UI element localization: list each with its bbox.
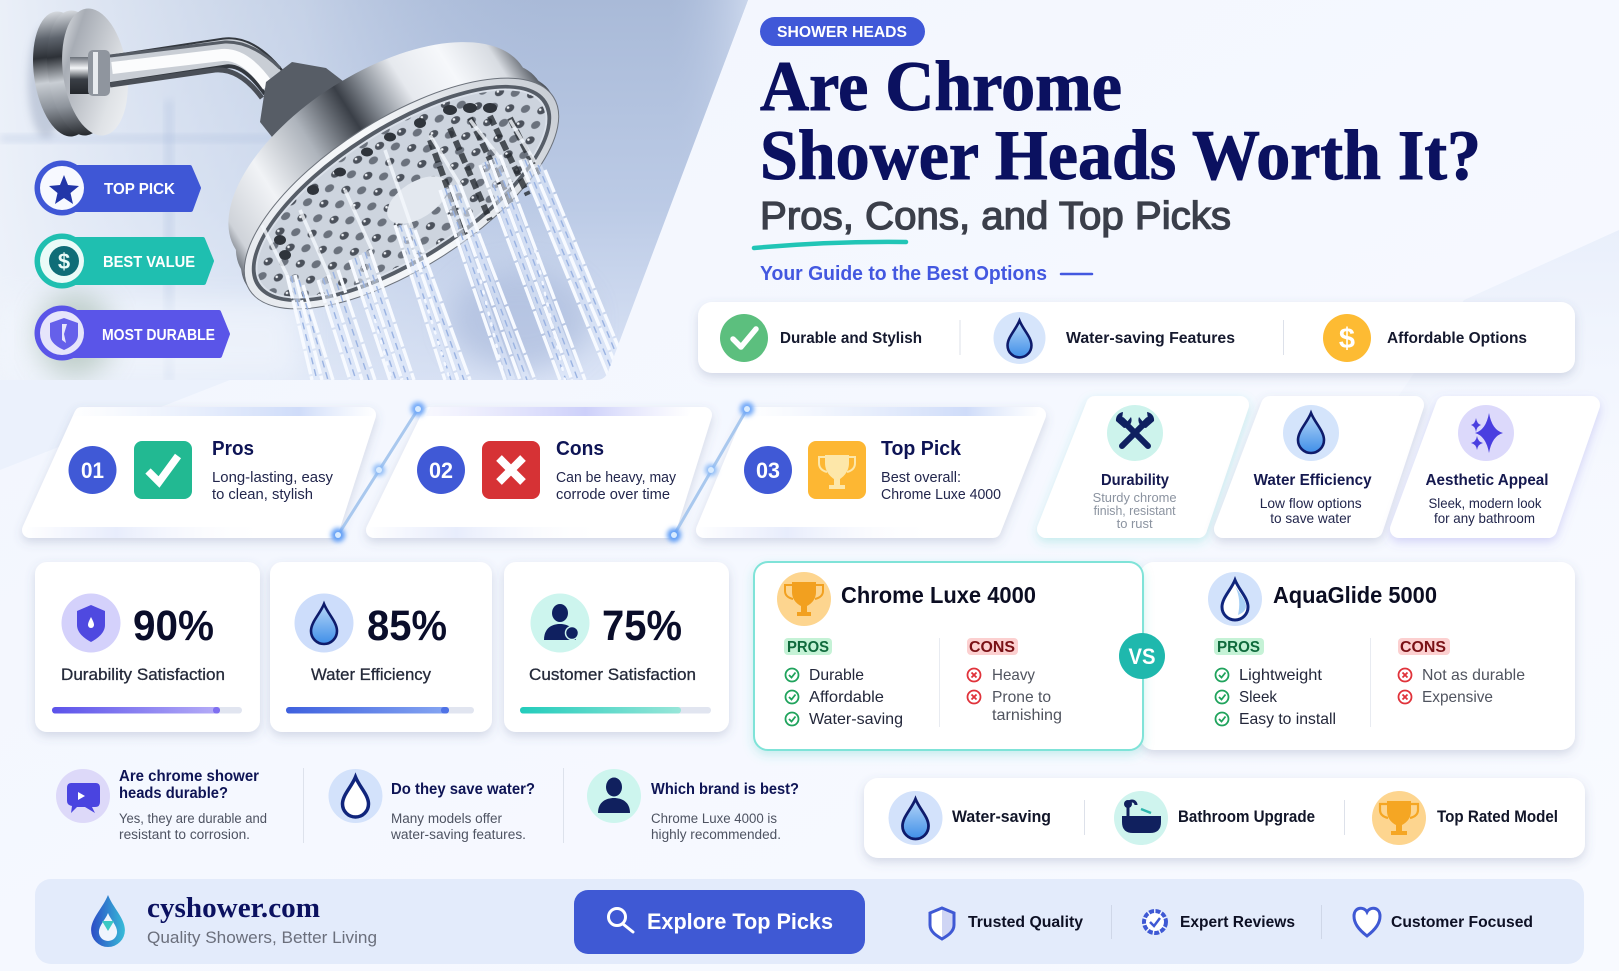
description: Best overall: xyxy=(881,470,961,486)
icon: shield xyxy=(50,318,78,350)
number 03 xyxy=(744,446,792,494)
icon: water drop xyxy=(294,594,354,652)
connector between step 1 and 2 xyxy=(331,402,425,542)
stat card: customer satisfaction xyxy=(504,562,729,732)
VS badge xyxy=(1119,633,1165,679)
icon: cross tile xyxy=(482,441,540,499)
icon: green check xyxy=(720,314,768,362)
panel: step 01 pros xyxy=(24,407,376,538)
pros list: Water-saving xyxy=(809,711,903,728)
description xyxy=(556,470,677,503)
FAQ: durability: heads durable? xyxy=(119,785,228,802)
progress bar xyxy=(286,707,474,714)
panel: water efficiency xyxy=(1223,405,1415,529)
panel: key benefits: Water-saving Features xyxy=(1066,330,1235,347)
FAQ: water saving xyxy=(328,769,535,842)
pros list: Lightweight xyxy=(1239,667,1323,684)
panel: highlights bar: Water-saving xyxy=(952,808,1051,826)
description: finish, resistant xyxy=(1094,503,1176,518)
cons list: Prone to xyxy=(992,689,1051,706)
cons list: Heavy xyxy=(992,667,1035,684)
panel: durability: Durability xyxy=(1101,472,1169,489)
trust: customer focused xyxy=(1354,908,1533,936)
pros list: Affordable xyxy=(809,689,884,706)
pros list: Durable xyxy=(809,667,864,684)
description: to clean, stylish xyxy=(212,487,313,503)
progress bar xyxy=(520,707,711,714)
FAQ: best brand: Which brand is best? xyxy=(651,781,799,798)
pros list xyxy=(784,638,903,728)
cons list: Not as durable xyxy=(1422,667,1525,684)
description: Long-lasting, easy xyxy=(212,470,334,486)
FAQ: durability: Are chrome shower xyxy=(119,768,259,785)
shower head body xyxy=(228,42,560,310)
panel: step 02 cons: Cons xyxy=(556,438,604,460)
description: Chrome Luxe 4000 xyxy=(881,487,1001,503)
panel: key benefits: Durable and Stylish xyxy=(780,330,922,347)
panel: aesthetic appeal: Aesthetic Appeal xyxy=(1426,472,1548,489)
icon: water drop xyxy=(994,312,1046,364)
description: Can be heavy, may xyxy=(556,470,677,486)
subtitle: Pros, Cons, and Top Picks xyxy=(760,195,1231,238)
description: Sleek, modern look xyxy=(1428,495,1542,511)
icon: wrench tools xyxy=(1107,405,1163,461)
icon: shield xyxy=(62,594,120,652)
FAQ: best brand: Chrome Luxe 4000 is xyxy=(651,811,777,826)
FAQ: durability: Yes, they are durable and xyxy=(119,811,267,826)
icon: sparkles xyxy=(1458,405,1514,461)
panel: step 03 top pick: Top Pick xyxy=(881,438,962,460)
panel: durability xyxy=(1046,405,1240,531)
number 01: 01 xyxy=(81,458,104,483)
icon: dollar coin xyxy=(49,246,79,276)
icon: dollar xyxy=(1323,314,1371,362)
icon: water drop xyxy=(888,791,942,845)
dark nozzles and reflections xyxy=(274,103,497,260)
neck collar xyxy=(260,62,343,137)
icon: water drop xyxy=(1208,572,1262,626)
pros list: Easy to install xyxy=(1239,711,1336,728)
badge: top pick: TOP PICK xyxy=(104,181,175,198)
wall flange xyxy=(33,8,128,136)
trust: quality xyxy=(930,908,1083,939)
button: explore top picks: Explore Top Picks xyxy=(647,909,833,934)
description xyxy=(1428,495,1542,526)
cons list xyxy=(967,638,1062,724)
comparison card: AquaGlide 5000 xyxy=(1140,562,1575,750)
badge: top pick xyxy=(34,160,199,216)
cons list: Expensive xyxy=(1422,689,1493,706)
panel: aesthetic appeal xyxy=(1399,405,1591,529)
title: Shower Heads Worth It? xyxy=(760,117,1481,195)
panel: key benefits: Affordable Options xyxy=(1387,330,1527,347)
icon: dollar: $ xyxy=(1339,323,1355,355)
number 01 xyxy=(68,446,116,494)
stat card: customer satisfaction: 75% xyxy=(602,602,682,650)
badge: most durable xyxy=(34,306,228,360)
trust: expert reviews xyxy=(1144,911,1295,933)
description: corrode over time xyxy=(556,487,670,503)
trust: customer focused: Customer Focused xyxy=(1391,914,1533,931)
pros list: PROS xyxy=(1217,639,1260,656)
footer bar: Quality Showers, Better Living xyxy=(147,928,377,947)
icon: trophy xyxy=(777,572,831,626)
badge: best value: BEST VALUE xyxy=(103,254,195,271)
logo drop xyxy=(91,895,125,947)
description xyxy=(1093,490,1177,531)
icon: person with chat xyxy=(530,594,590,652)
number 02: 02 xyxy=(429,458,453,483)
water streams xyxy=(262,120,632,380)
icon: person xyxy=(587,769,641,823)
title: Are Chrome xyxy=(760,48,1122,126)
number 03: 03 xyxy=(756,458,780,483)
wall shadow xyxy=(25,28,58,139)
FAQ: durability: resistant to corrosion. xyxy=(119,827,250,842)
cons list: tarnishing xyxy=(992,707,1062,724)
icon: dollar coin: $ xyxy=(58,249,70,274)
footer bar: cyshower.com xyxy=(147,893,320,924)
panel: highlights bar: Top Rated Model xyxy=(1437,808,1558,826)
stat card: customer satisfaction: Customer Satisfaction xyxy=(529,665,696,684)
FAQ: best brand: highly recommended. xyxy=(651,827,781,842)
stat card: water efficiency xyxy=(270,562,492,732)
FAQ: water saving: Many models offer xyxy=(391,811,502,826)
stat card: water efficiency: Water Efficiency xyxy=(311,665,431,684)
icon: water drop xyxy=(1283,405,1339,461)
title xyxy=(760,48,1481,195)
cons list xyxy=(1398,638,1525,706)
progress bar xyxy=(52,707,242,714)
number 02 xyxy=(417,446,465,494)
hero photo: chrome shower head with water xyxy=(0,0,760,380)
icon: trophy xyxy=(1372,791,1426,845)
cons list: CONS xyxy=(969,639,1015,656)
description: for any bathroom xyxy=(1434,510,1535,526)
comparison card: Chrome Luxe 4000 xyxy=(754,562,1143,750)
icon: check tile xyxy=(134,441,192,499)
icon: speech bubbles xyxy=(56,769,110,823)
teal underline xyxy=(754,242,906,248)
FAQ: water saving: Do they save water? xyxy=(391,781,535,798)
pros list: Sleek xyxy=(1239,689,1278,706)
button: explore top picks xyxy=(574,890,865,954)
panel: highlights bar xyxy=(864,778,1585,858)
panel: water efficiency: Water Efficiency xyxy=(1254,472,1372,489)
tagline with arrow: Your Guide to the Best Options xyxy=(760,263,1047,285)
description xyxy=(881,470,1001,503)
badge: most durable: MOST DURABLE xyxy=(102,327,215,344)
description: to save water xyxy=(1270,510,1352,526)
icon: star xyxy=(49,175,79,204)
panel: highlights bar: Bathroom Upgrade xyxy=(1178,808,1315,826)
VS badge: VS xyxy=(1128,644,1156,669)
category pill xyxy=(760,17,925,46)
trust: expert reviews: Expert Reviews xyxy=(1180,914,1295,931)
category pill: SHOWER HEADS xyxy=(777,24,907,41)
panel: key benefits xyxy=(698,302,1575,373)
FAQ: water saving: water-saving features. xyxy=(390,827,526,842)
description: Sturdy chrome xyxy=(1093,490,1177,505)
description: to rust xyxy=(1117,516,1153,531)
pros list xyxy=(1214,638,1336,728)
pros list: PROS xyxy=(787,639,829,656)
description xyxy=(1260,495,1362,526)
stat card: water efficiency: 85% xyxy=(367,602,447,650)
icon: bathtub xyxy=(1114,791,1168,845)
icon: trophy tile xyxy=(808,441,866,499)
icon: water drop xyxy=(328,769,382,823)
footer bar xyxy=(35,879,1584,964)
FAQ: best brand xyxy=(587,769,799,842)
stat card: durability satisfaction: Durability Satisfaction xyxy=(61,665,225,684)
panel: step 03 top pick xyxy=(696,407,1040,538)
comparison card: AquaGlide 5000: AquaGlide 5000 xyxy=(1273,582,1437,608)
FAQ: durability xyxy=(56,768,267,842)
connector between step 2 and 3 xyxy=(667,402,754,542)
panel: step 01 pros: Pros xyxy=(212,438,254,460)
badge: best value xyxy=(34,234,212,288)
comparison card: Chrome Luxe 4000: Chrome Luxe 4000 xyxy=(841,582,1036,608)
stat card: durability satisfaction: 90% xyxy=(133,602,214,650)
cons list: CONS xyxy=(1400,639,1446,656)
description xyxy=(212,470,334,503)
stat card: durability satisfaction xyxy=(35,562,260,732)
shower arm xyxy=(70,42,280,98)
description: Low flow options xyxy=(1260,495,1362,511)
icon: search xyxy=(608,908,633,932)
trust: quality: Trusted Quality xyxy=(968,914,1083,931)
panel: step 02 cons xyxy=(366,407,704,538)
